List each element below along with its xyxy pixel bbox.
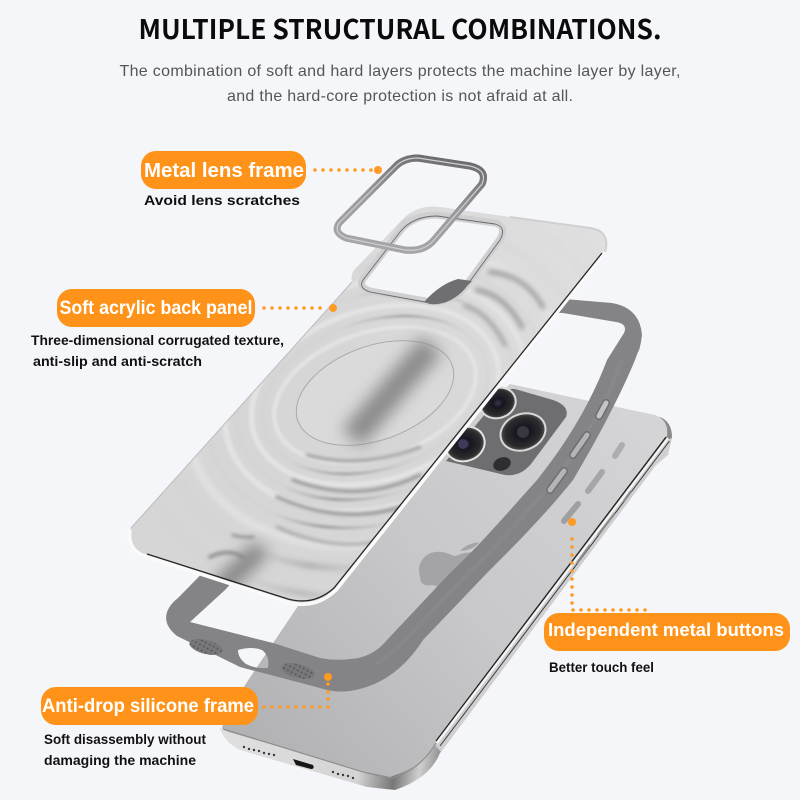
frame slot upper <box>599 403 606 416</box>
title: MULTIPLE STRUCTURAL COMBINATIONS. <box>138 8 662 47</box>
phone body <box>220 383 672 790</box>
description: Better touch feel <box>549 660 654 675</box>
metal lens frame front part <box>337 158 484 250</box>
camera bump through hole <box>424 279 472 304</box>
connector dots <box>313 166 382 174</box>
lower ripple arcs <box>210 447 420 557</box>
description <box>31 333 284 369</box>
phone edge black line <box>436 437 666 741</box>
description: Three-dimensional corrugated texture, <box>31 333 284 348</box>
callout: independent metal buttons <box>544 518 790 675</box>
frame slot lower <box>550 471 564 490</box>
pill <box>544 613 790 651</box>
connector dots <box>262 673 332 709</box>
speaker holes right <box>332 771 354 779</box>
lens top <box>476 383 520 423</box>
speaker mesh left <box>188 636 224 658</box>
speaker holes left <box>243 746 275 756</box>
phone bottom edge line <box>223 729 436 778</box>
panel chrome edge <box>130 252 605 604</box>
pill <box>141 151 306 189</box>
callout: metal lens frame <box>141 151 382 208</box>
pill <box>41 687 258 725</box>
acrylic back panel <box>130 206 608 606</box>
silicone frame <box>166 290 642 692</box>
pill label: Soft acrylic back panel <box>60 298 252 319</box>
lens left <box>440 421 490 467</box>
phone edge white line <box>437 438 668 743</box>
subtitle text: and the hard-core protection is not afraid at all. <box>227 88 573 105</box>
lens right <box>495 407 551 457</box>
pill <box>57 289 255 327</box>
metal lens frame back part <box>337 158 484 250</box>
description <box>44 732 206 768</box>
description: anti-slip and anti-scratch <box>33 354 202 369</box>
magnetic centre disc <box>296 340 454 446</box>
phone back face <box>222 384 667 777</box>
camera bump <box>446 389 567 475</box>
subtitle text: The combination of soft and hard layers protects the machine layer by layer, <box>120 63 680 80</box>
metal button 1 <box>564 504 578 521</box>
phone edge second line <box>440 441 670 746</box>
connector dots <box>262 304 337 312</box>
frame slot middle <box>573 435 587 455</box>
charging port <box>293 759 314 769</box>
pill label: Independent metal buttons <box>548 619 784 640</box>
metal button 2 <box>588 472 602 491</box>
description: damaging the machine <box>44 753 197 768</box>
frame inner highlight <box>376 360 622 664</box>
description: Avoid lens scratches <box>144 192 300 208</box>
panel surface <box>130 206 606 602</box>
pill label: Anti-drop silicone frame <box>42 696 254 717</box>
phone side rail light <box>434 438 672 752</box>
speaker mesh right <box>280 660 316 682</box>
callout: soft acrylic back panel <box>31 289 337 369</box>
connector dots <box>568 518 647 612</box>
description: Soft disassembly without <box>44 732 206 747</box>
pill label: Metal lens frame <box>144 160 304 182</box>
upper right ripple arcs <box>465 272 543 345</box>
subtitle text <box>120 63 680 105</box>
apple logo <box>419 542 479 589</box>
disc streak <box>352 345 432 438</box>
side buttons on rail <box>577 491 631 563</box>
phone side chrome <box>220 417 672 790</box>
flash <box>491 455 513 473</box>
panel left edge <box>131 282 352 528</box>
dark smear lower left <box>218 548 262 590</box>
camera cutout ring <box>362 215 503 302</box>
callout: anti-drop silicone frame <box>41 673 332 768</box>
metal button 3 <box>615 445 622 456</box>
